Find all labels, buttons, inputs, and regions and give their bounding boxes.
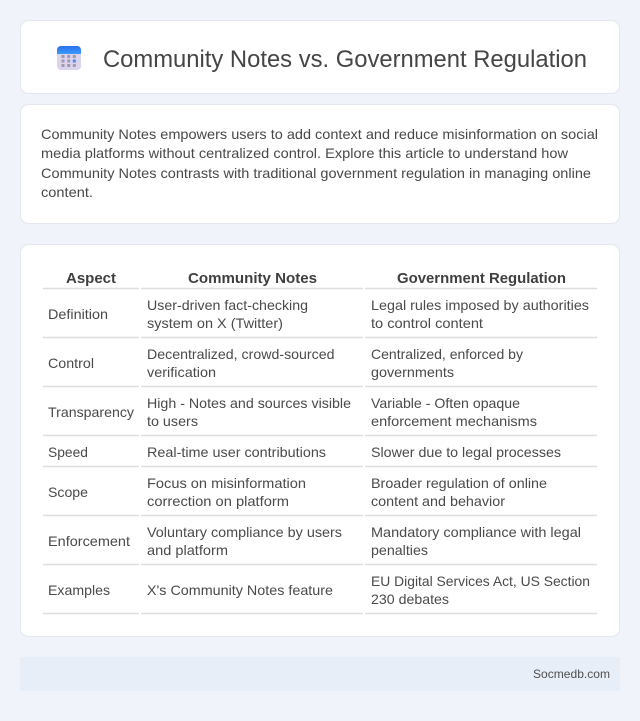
row: scope: Broader regulation of online [371, 475, 547, 491]
table header: Government Regulation [397, 270, 566, 287]
row: examples: X's Community Notes feature [147, 582, 333, 598]
title: Community Notes vs. Government Regulation [103, 46, 587, 73]
table header: Community Notes [188, 270, 317, 287]
row: examples: Examples [48, 582, 110, 598]
intro text: Community Notes empowers users to add context and reduce misinformation on social [41, 126, 598, 142]
row: transparency: to users [147, 413, 198, 429]
row: scope: content and behavior [371, 493, 505, 509]
intro text: media platforms without centralized control. Explore this article to understand how [41, 145, 569, 161]
row: transparency: Variable - Often opaque [371, 395, 520, 411]
row: transparency [48, 395, 537, 429]
row: definition: Legal rules imposed by authorities [371, 297, 589, 313]
row: definition: to control content [371, 315, 483, 331]
row: speed: Speed [48, 444, 88, 460]
row: definition: User-driven fact-checking [147, 297, 308, 313]
row: transparency: Transparency [48, 404, 134, 420]
row: control [48, 346, 523, 380]
row: definition [48, 297, 589, 331]
row: enforcement: Enforcement [48, 533, 130, 549]
row: speed: Real-time user contributions [147, 444, 326, 460]
row: transparency: enforcement mechanisms [371, 413, 537, 429]
table header [66, 270, 566, 287]
row: speed [48, 444, 561, 460]
panel: comparison table [20, 244, 620, 636]
row: definition: Definition [48, 306, 108, 322]
row: enforcement [48, 524, 581, 558]
row: enforcement: penalties [371, 542, 428, 558]
row: examples: 230 debates [371, 591, 449, 607]
row: examples [48, 573, 590, 607]
row: control: Centralized, enforced by [371, 346, 523, 362]
intro text [41, 126, 598, 200]
row: examples: EU Digital Services Act, US Section [371, 573, 590, 589]
row: transparency: High - Notes and sources visible [147, 395, 351, 411]
intro text: Community Notes contrasts with traditional government regulation in managing online [41, 165, 591, 181]
icon: calendar [57, 46, 81, 70]
table header: Aspect [66, 270, 116, 287]
footer credit: Socmedb.com [533, 667, 610, 681]
intro text: content. [41, 184, 93, 200]
row: scope: Scope [48, 484, 88, 500]
panel: title card [20, 20, 620, 94]
panel: intro [20, 104, 620, 224]
row: enforcement: Mandatory compliance with legal [371, 524, 581, 540]
row: enforcement: Voluntary compliance by users [147, 524, 342, 540]
row: scope [48, 475, 547, 509]
row: scope: Focus on misinformation [147, 475, 306, 491]
row: enforcement: and platform [147, 542, 228, 558]
row: control: Control [48, 355, 94, 371]
row: scope: correction on platform [147, 493, 289, 509]
row: control: verification [147, 364, 216, 380]
row: control: governments [371, 364, 454, 380]
row: control: Decentralized, crowd-sourced [147, 346, 334, 362]
row: speed: Slower due to legal processes [371, 444, 561, 460]
row: definition: system on X (Twitter) [147, 315, 283, 331]
footer [20, 657, 620, 691]
